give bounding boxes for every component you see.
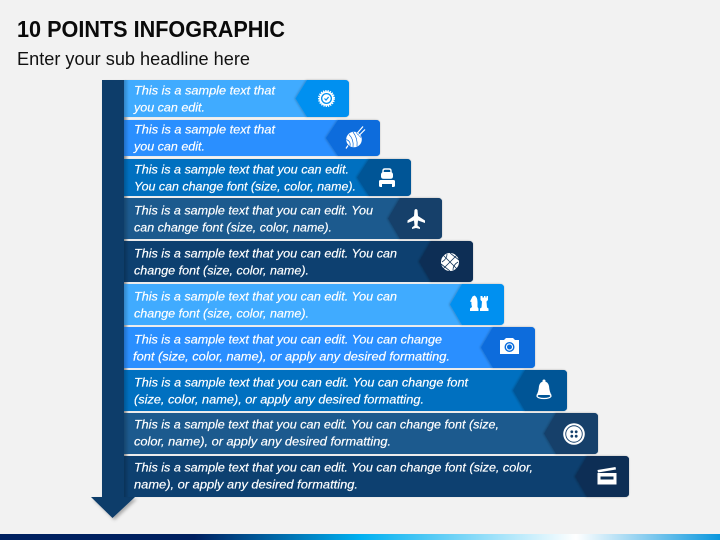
text 6: This is a sample text that you can edit. You can (134, 290, 397, 304)
text 5: This is a sample text that you can edit. You can (134, 246, 397, 260)
bar 8 (124, 370, 567, 411)
row 3 (124, 159, 411, 196)
bar 10 (124, 456, 629, 497)
footer gradient band (0, 534, 720, 540)
hexagon 4 (388, 198, 442, 239)
text 7 (133, 332, 450, 364)
text 8 (134, 376, 469, 406)
down arrow (91, 80, 135, 518)
row 10 (124, 456, 629, 497)
title: 10 POINTS INFOGRAPHIC (17, 16, 285, 42)
row 5 (124, 241, 473, 282)
icon: button (563, 423, 585, 445)
hexagon 10 (575, 456, 629, 497)
text 9: This is a sample text that you can edit. You can change font (size, (134, 418, 499, 432)
text 8: This is a sample text that you can edit. You can change font (134, 376, 469, 390)
bar 7 (124, 327, 535, 368)
icon: airplane (408, 209, 425, 229)
text 10: This is a sample text that you can edit. You can change font (size, color, (134, 460, 533, 474)
row 1 (124, 80, 349, 117)
hexagon 7 (481, 327, 535, 368)
text 4: can change font (size, color, name). (134, 220, 332, 234)
icon: clapperboard (598, 467, 616, 484)
text 3: This is a sample text that you can edit. (134, 162, 349, 176)
icon: backpack (379, 169, 395, 187)
text 6 (134, 290, 397, 320)
text 7: font (size, color, name), or apply any desired formatting. (133, 350, 450, 364)
text 10: name), or apply any desired formatting. (134, 478, 358, 492)
text 7: This is a sample text that you can edit. You can change (134, 332, 442, 346)
hexagon 8 (513, 370, 567, 411)
text 4: This is a sample text that you can edit. You (134, 204, 373, 218)
icon: chess pieces (470, 296, 488, 311)
icon: camera (500, 338, 519, 354)
row 7 (124, 327, 535, 368)
hexagon 9 (544, 413, 598, 454)
bar 1 (124, 80, 349, 117)
text 6: change font (size, color, name). (134, 306, 309, 320)
bar 5 (124, 241, 473, 282)
bar 4 (124, 198, 442, 239)
hexagon 3 (357, 159, 411, 196)
text 2 (133, 122, 276, 154)
bar 9 (124, 413, 598, 454)
text 1: you can edit. (133, 100, 205, 114)
text 8: (size, color, name), or apply any desired formatting. (134, 392, 424, 406)
text 1: This is a sample text that (134, 84, 276, 98)
icon: bell (536, 380, 552, 398)
row 8 (124, 370, 567, 411)
hexagon 2 (326, 120, 380, 156)
shaft shadow (124, 80, 129, 497)
text 5: change font (size, color, name). (134, 264, 309, 278)
subtitle: Enter your sub headline here (17, 49, 250, 69)
text 3 (134, 162, 356, 194)
hexagon 5 (419, 241, 473, 282)
text 2: This is a sample text that (134, 122, 276, 136)
icon: basketball (441, 253, 459, 271)
hexagon 6 (450, 284, 504, 325)
text 2: you can edit. (133, 140, 205, 154)
icon: yarn ball (346, 126, 365, 148)
hexagon 1 (296, 80, 349, 117)
row 2 (124, 120, 380, 156)
text 9 (134, 418, 499, 448)
bar 2 (124, 120, 380, 156)
text 1 (133, 84, 276, 114)
row 9 (124, 413, 598, 454)
text 9: color, name), or apply any desired formatting. (134, 434, 391, 448)
bar 6 (124, 284, 504, 325)
icon: badge check (319, 91, 334, 106)
bar 3 (124, 159, 411, 196)
text 4 (134, 204, 373, 234)
text 10 (134, 460, 533, 492)
text 3: You can change font (size, color, name). (134, 180, 356, 194)
row 6 (124, 284, 504, 325)
text 5 (134, 246, 397, 278)
row 4 (124, 198, 442, 239)
